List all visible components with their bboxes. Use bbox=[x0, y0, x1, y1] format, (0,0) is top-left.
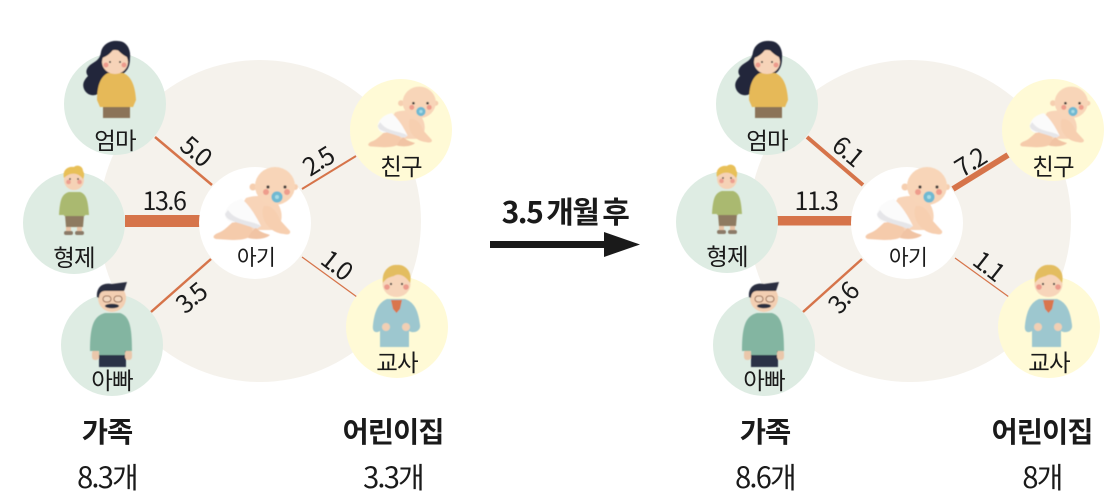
node: baby bbox=[851, 167, 963, 279]
summary: daycare before: 어린이집 bbox=[343, 410, 443, 451]
node: dad: 아빠 bbox=[91, 362, 133, 396]
node: teacher bbox=[346, 265, 448, 378]
node: baby bbox=[199, 167, 311, 279]
value: teacher: 1.0 bbox=[314, 241, 361, 288]
summary: family after: 가족 bbox=[740, 410, 791, 451]
panel: before network bbox=[23, 41, 452, 396]
summary: daycare before: 3.3개 bbox=[363, 455, 423, 497]
value: sibling: 11.3 bbox=[794, 182, 838, 218]
node: teacher: 교사 bbox=[376, 344, 418, 378]
value: mom: 6.1 bbox=[825, 127, 872, 174]
summary: family after: 8.6개 bbox=[735, 455, 795, 497]
arrow with label bbox=[490, 188, 640, 257]
node: sibling bbox=[23, 166, 125, 274]
background circle bbox=[749, 60, 1071, 382]
summary: daycare after: 어린이집 bbox=[992, 410, 1092, 451]
summary: family before bbox=[77, 410, 137, 497]
node: sibling bbox=[676, 165, 778, 273]
summary: daycare after: 8개 bbox=[1022, 455, 1062, 497]
value: mom: 5.0 bbox=[173, 127, 220, 174]
value: dad: 3.6 bbox=[819, 274, 867, 321]
node: sibling: 형제 bbox=[706, 238, 748, 272]
node: friend bbox=[350, 79, 452, 182]
link: mom to baby bbox=[155, 137, 212, 185]
node: mom bbox=[64, 41, 166, 156]
link: dad to baby bbox=[151, 259, 211, 312]
value: teacher: 1.1 bbox=[966, 242, 1013, 289]
summary: daycare after bbox=[992, 410, 1092, 497]
summary: family before: 가족 bbox=[82, 410, 133, 451]
summary: daycare before bbox=[343, 410, 443, 497]
link: friend to baby bbox=[302, 156, 356, 189]
link: mom to baby bbox=[807, 137, 863, 185]
node: dad bbox=[713, 282, 815, 396]
node: dad bbox=[61, 282, 163, 396]
value: sibling: 13.6 bbox=[142, 182, 186, 218]
panel: after network bbox=[676, 41, 1104, 396]
value: friend: 7.2 bbox=[947, 138, 993, 185]
link: teacher to baby bbox=[302, 257, 357, 297]
value: dad: 3.5 bbox=[167, 273, 214, 321]
node: baby: 아기 bbox=[889, 241, 927, 272]
link: friend to baby bbox=[953, 155, 1008, 189]
summary: family after bbox=[735, 410, 795, 497]
link: sibling to baby bbox=[125, 215, 200, 227]
node: teacher: 교사 bbox=[1028, 344, 1070, 378]
node: teacher bbox=[998, 265, 1100, 378]
node: dad: 아빠 bbox=[743, 362, 785, 396]
link: sibling to baby bbox=[777, 216, 852, 226]
link: teacher to baby bbox=[955, 258, 1009, 297]
node: mom: 엄마 bbox=[746, 122, 788, 156]
node: friend bbox=[1002, 79, 1104, 182]
node: friend: 친구 bbox=[380, 148, 422, 182]
link: dad to baby bbox=[803, 259, 862, 312]
node: baby: 아기 bbox=[237, 241, 275, 272]
arrow with label: 3.5 개월 후 bbox=[502, 188, 629, 232]
node: sibling: 형제 bbox=[53, 239, 95, 273]
summary: family before: 8.3개 bbox=[77, 455, 137, 497]
node: mom: 엄마 bbox=[94, 122, 136, 156]
value: friend: 2.5 bbox=[295, 137, 341, 184]
background circle bbox=[99, 60, 421, 382]
node: mom bbox=[716, 41, 818, 156]
node: friend: 친구 bbox=[1032, 148, 1074, 182]
